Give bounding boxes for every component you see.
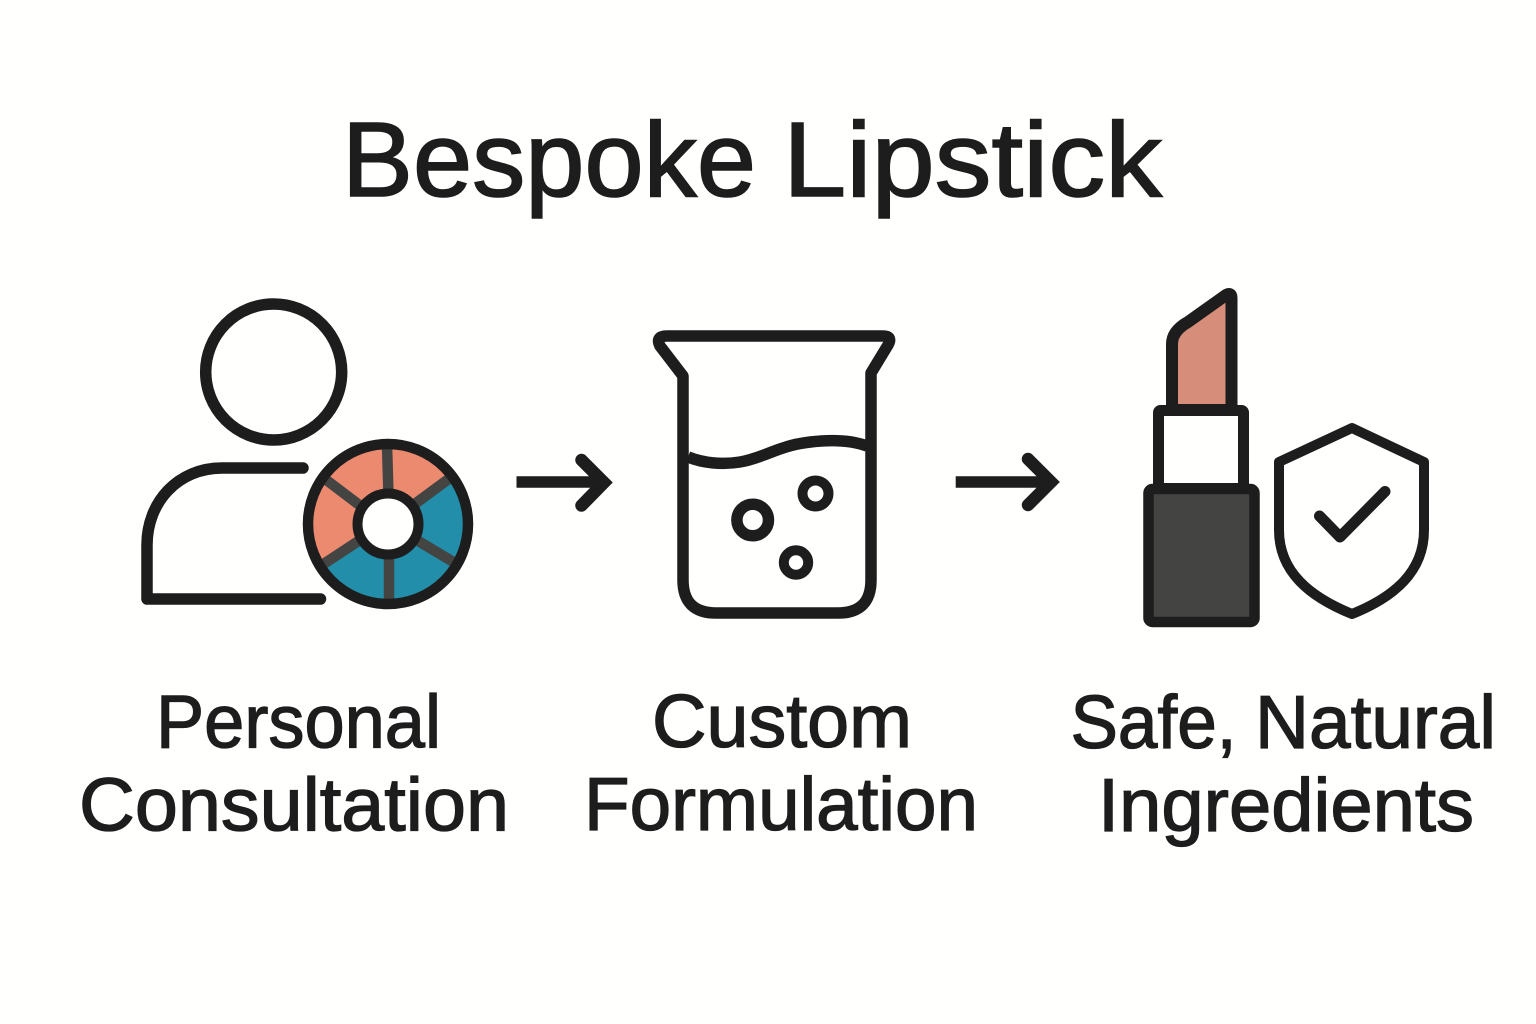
arrow: formulation to ingredients — [956, 459, 1051, 505]
lipstick collar — [1158, 410, 1244, 488]
label: safe natural ingredients — [1070, 680, 1496, 847]
icon: lipstick — [1148, 294, 1254, 622]
icon: person with colour wheel — [147, 304, 468, 604]
label: personal consultation: Consultation — [79, 762, 509, 846]
label: personal consultation: Personal — [156, 680, 441, 764]
colour wheel — [308, 444, 468, 604]
label: custom formulation — [584, 679, 978, 846]
liquid surface — [688, 441, 867, 463]
beaker outline — [659, 336, 890, 613]
title: Lipstick — [783, 101, 1163, 219]
label: safe natural ingredients: Ingredients — [1098, 763, 1474, 847]
title: Bespoke — [342, 101, 756, 219]
person head — [206, 304, 342, 440]
arrow: consultation to formulation — [516, 460, 604, 506]
label: safe natural ingredients: Safe, — [1070, 680, 1236, 764]
icon: safety shield with check — [1279, 428, 1424, 614]
label: safe natural ingredients: Natural — [1255, 680, 1496, 764]
lipstick case — [1148, 489, 1254, 622]
lipstick bullet — [1172, 294, 1232, 410]
person body — [147, 468, 320, 599]
label: personal consultation — [79, 680, 509, 846]
title — [342, 101, 1163, 219]
label: custom formulation: Custom — [652, 679, 912, 763]
icon: beaker with liquid — [659, 336, 890, 613]
bubbles — [737, 480, 828, 575]
label: custom formulation: Formulation — [584, 762, 978, 846]
